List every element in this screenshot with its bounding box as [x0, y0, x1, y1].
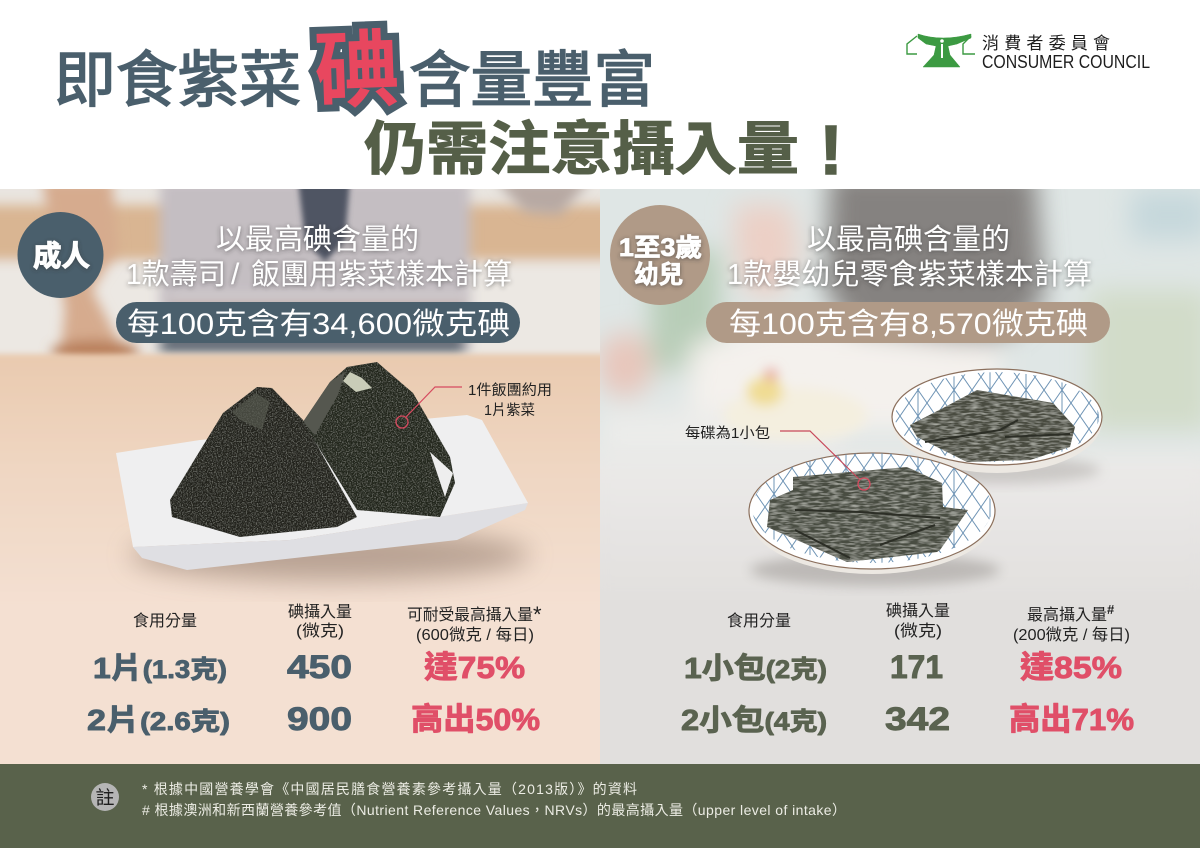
- blurred background photo: adult at table: [0, 180, 620, 764]
- row 1: 達75%: [424, 650, 525, 685]
- callout: one sheet per rice ball: 1片紫菜: [484, 402, 535, 419]
- heading: adult sample: 1款壽司: [126, 258, 226, 291]
- column headers: 碘攝入量: [886, 601, 950, 620]
- title exclamation mark: !: [819, 111, 843, 189]
- table: adult intake: [87, 602, 542, 737]
- column headers: (微克): [296, 622, 344, 640]
- badge: toddlers: 1至3歲: [619, 234, 702, 262]
- logo: Consumer Council: [907, 34, 1150, 72]
- callout: one pack per plate: 每碟為1小包: [685, 425, 770, 442]
- icon: note badge: [91, 783, 119, 811]
- icon: scales: [907, 34, 975, 67]
- row 2: 2小包 (4克): [681, 704, 827, 737]
- panel: toddlers: [580, 170, 1200, 764]
- table: toddler intake: [681, 601, 1134, 737]
- column headers: #: [1107, 602, 1115, 617]
- column headers: 食用分量: [727, 612, 791, 630]
- column headers: [727, 601, 1130, 644]
- column headers: (200微克 / 每日): [1013, 626, 1130, 644]
- highlighted word: iodine: 碘: [313, 23, 401, 119]
- photo: rice balls on plate: [116, 362, 530, 581]
- back plate: [892, 369, 1102, 473]
- badge: adults: [18, 212, 104, 298]
- title line 1 left: 即食紫菜: [54, 46, 301, 114]
- callout: one sheet per rice ball: [396, 382, 552, 428]
- note: hash source: # 根據澳洲和新西蘭營養參考值（Nutrient Reference Values，NRVs）的最高攝入量（upper level of intake）: [142, 802, 846, 818]
- row 2: 342: [885, 701, 950, 737]
- heading: toddler sample: 以最高碘含量的: [807, 223, 1010, 256]
- badge: adults: 成人: [33, 240, 90, 273]
- icon: note badge: 註: [95, 787, 115, 809]
- badge: toddlers: 幼兒: [634, 261, 683, 289]
- row 1: 171: [890, 649, 943, 685]
- row 1: 450: [287, 649, 352, 685]
- heading: adult sample: 以最高碘含量的: [216, 223, 419, 256]
- row 1: 1小包 (2克): [684, 652, 827, 685]
- title line 1 right: 含量豐富: [409, 46, 655, 114]
- row 2: 2片 (2.6克): [87, 704, 230, 737]
- logo English name: CONSUMER COUNCIL: [982, 52, 1150, 72]
- note: asterisk source: * 根據中國營養學會《中國居民膳食營養素參考攝入量（2013版）》的資料: [142, 781, 637, 797]
- column headers: [133, 602, 542, 644]
- title line 2: 仍需注意攝入量: [364, 117, 799, 182]
- row 2: [681, 701, 1134, 737]
- column headers: 可耐受最高攝入量: [407, 605, 533, 624]
- plate: [116, 415, 528, 547]
- photo: seaweed snack plates: [749, 369, 1102, 586]
- heading: toddler sample: 1款嬰幼兒零食紫菜樣本計算: [727, 258, 1092, 291]
- callout: one sheet per rice ball: 1件飯團約用: [468, 382, 552, 399]
- column headers: (600微克 / 每日): [416, 626, 534, 644]
- logo Chinese name: 消費者委員會: [982, 34, 1110, 53]
- rice ball front: [170, 387, 357, 537]
- column headers: 碘攝入量: [288, 602, 352, 621]
- heading: adult sample: /: [231, 258, 240, 291]
- row 1: 達85%: [1020, 650, 1122, 685]
- heading: toddler sample: [727, 223, 1092, 291]
- column headers: (微克): [894, 622, 942, 640]
- row 2: [87, 701, 540, 737]
- front plate: [749, 453, 995, 574]
- pill: toddler iodine content: 每100克含有8,570微克碘: [729, 308, 1088, 341]
- pill: toddler iodine content: [706, 302, 1110, 343]
- rice ball back: [303, 362, 455, 517]
- pill: adult iodine content: 每100克含有34,600微克碘: [127, 308, 510, 341]
- title: [54, 23, 843, 189]
- column headers: *: [533, 602, 542, 627]
- callout: one pack per plate: [685, 425, 870, 490]
- blurred background photo: child at table: [580, 170, 1200, 764]
- column headers: 食用分量: [133, 612, 197, 630]
- row 1: [684, 649, 1122, 685]
- row 2: 高出50%: [411, 702, 540, 737]
- heading: adult sample: [126, 223, 512, 291]
- row 2: 900: [287, 701, 352, 737]
- column headers: 最高攝入量: [1027, 605, 1107, 624]
- footer notes: [0, 764, 1200, 848]
- row 1: 1片(1.3克): [93, 652, 227, 685]
- panel: adults: [0, 180, 620, 764]
- heading: adult sample: 飯團用紫菜樣本計算: [251, 258, 512, 291]
- row 2: 高出71%: [1009, 702, 1134, 737]
- row 1: [93, 649, 525, 685]
- badge: toddlers: [610, 205, 710, 305]
